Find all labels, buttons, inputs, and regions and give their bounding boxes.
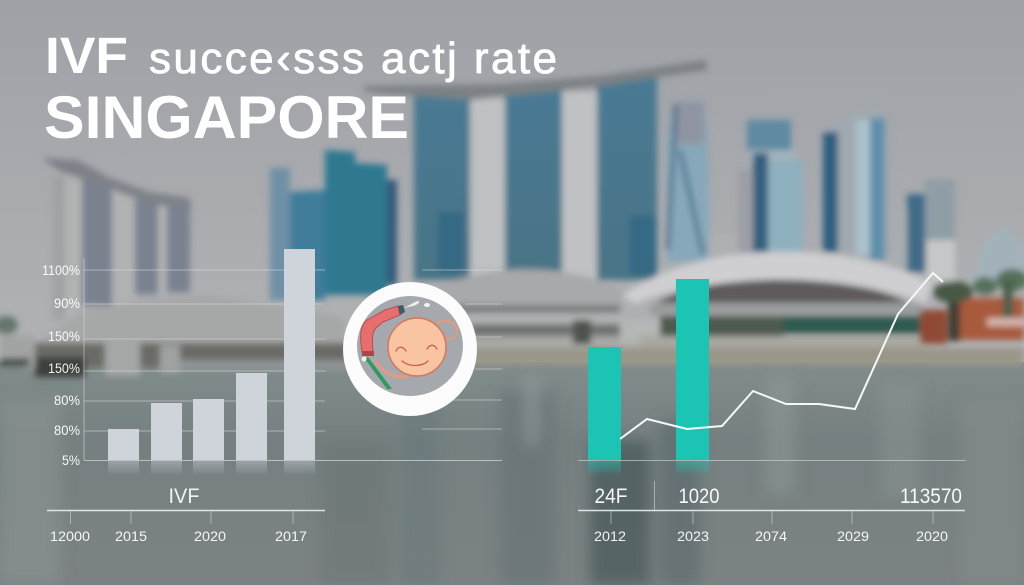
year labels: 2015 — [115, 528, 147, 544]
right combo chart — [578, 273, 966, 476]
year labels: 2017 — [275, 528, 307, 544]
y axis labels — [42, 262, 80, 468]
dome — [622, 252, 932, 304]
icon: green tube — [365, 357, 392, 389]
right x axis — [578, 481, 965, 544]
icon: face — [388, 318, 446, 376]
year labels — [594, 528, 948, 544]
icon: red sleeve — [361, 306, 400, 352]
trend line — [620, 273, 943, 439]
left x axis — [47, 485, 325, 544]
title — [44, 27, 557, 151]
left small hotel — [53, 170, 190, 320]
baseline — [578, 460, 966, 462]
icon: smiling face medallion — [343, 282, 477, 416]
title line 2: SINGAPORE: SINGAPORE — [44, 84, 409, 151]
dome structures left of dome — [573, 320, 591, 344]
axis rule and ticks — [578, 510, 965, 512]
left bar chart — [42, 249, 502, 476]
teal cluster — [270, 168, 290, 300]
central arena — [430, 269, 622, 310]
y axis labels: 90% — [54, 295, 80, 311]
year labels — [50, 528, 307, 544]
bars — [108, 249, 315, 460]
value labels: 1020 — [678, 485, 720, 508]
distant right towers — [972, 227, 1024, 285]
bar reflections — [108, 461, 315, 476]
icon: arm — [375, 361, 408, 377]
y axis labels: 150% — [48, 328, 80, 344]
axis title: IVF — [168, 485, 200, 508]
value labels — [594, 485, 962, 508]
y axis labels: 5% — [62, 452, 80, 468]
year labels: 2020 — [916, 528, 948, 544]
y axis labels: 150% — [48, 360, 80, 376]
title line 1: IVF: IVF — [45, 27, 128, 84]
teal bar reflections — [588, 461, 709, 476]
y axis labels: 80% — [54, 422, 80, 438]
palms and red buildings — [920, 310, 947, 344]
low left pavilion — [25, 295, 345, 368]
y axis labels: 1100% — [42, 262, 80, 278]
year labels: 2023 — [677, 528, 709, 544]
teal bars — [588, 279, 709, 460]
title line 1: subtitle: succe‹sss actj rate — [149, 34, 557, 83]
large hotel towers — [414, 93, 470, 280]
right skyscrapers — [667, 100, 708, 262]
year labels: 2029 — [837, 528, 869, 544]
year labels: 2012 — [594, 528, 626, 544]
large hotel white gaps — [470, 98, 505, 288]
value labels: 24F — [594, 485, 628, 508]
y axis labels: 80% — [54, 392, 80, 408]
roof — [364, 60, 707, 100]
shore — [470, 348, 1024, 365]
axis rule and ticks — [47, 510, 325, 512]
year labels: 2074 — [755, 528, 787, 544]
year labels: 12000 — [50, 528, 90, 544]
icon: smile — [396, 345, 437, 366]
icon: cup handle — [437, 321, 457, 339]
gridlines and axis — [84, 258, 502, 460]
value labels: 113570 — [900, 485, 962, 508]
icon: nozzle and spray — [398, 305, 405, 315]
year labels: 2020 — [194, 528, 226, 544]
